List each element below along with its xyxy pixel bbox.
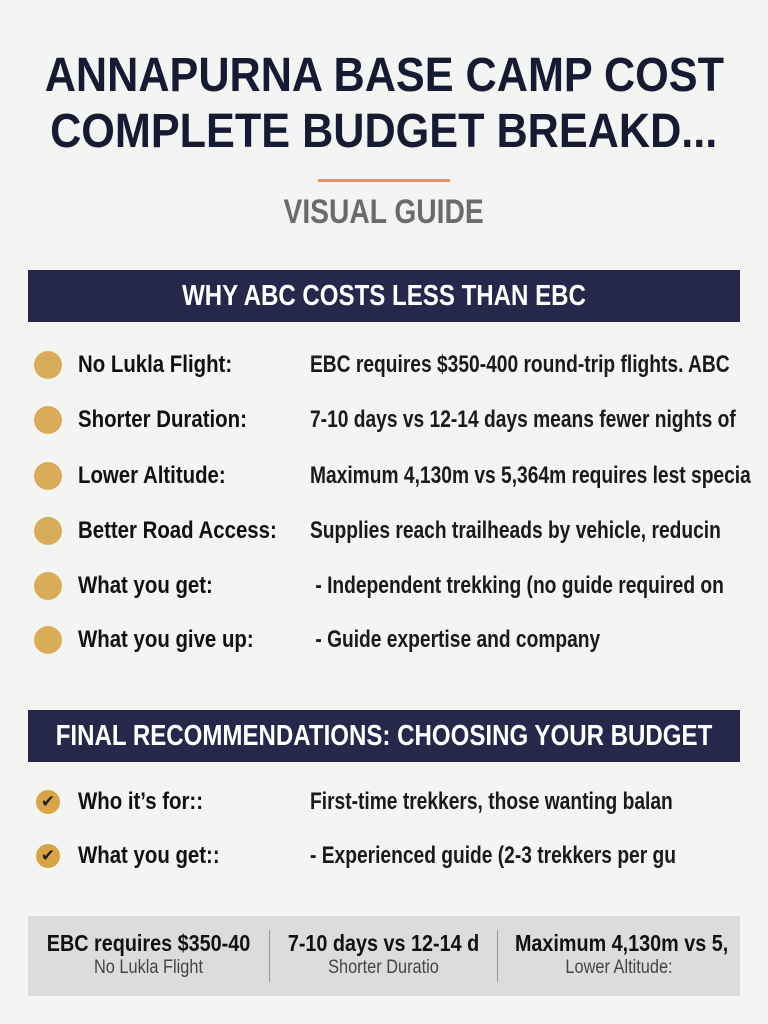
row: what you give up [34,626,600,654]
stat: duration: Shorter Duratio [328,957,439,978]
section header: final recommendations: FINAL RECOMMENDATIONS: CHOOSING YOUR BUDGET [56,720,712,752]
stat: duration [288,930,479,978]
row: shorter duration: 7-10 days vs 12-14 days means fewer nights of [310,406,736,433]
row: who it's for [36,788,673,815]
stat: flight: EBC requires $350-40 [47,930,250,956]
row: no lukla flight [34,351,730,379]
row: no lukla flight: No Lukla Flight: [78,351,232,378]
list: recommendations [36,788,676,869]
list: reasons [34,351,751,654]
divider accent [318,179,450,182]
stats strip [28,916,740,996]
row: what you get [34,572,724,600]
row: lower altitude [34,462,751,490]
stat: flight [47,930,250,978]
stat: duration: 7-10 days vs 12-14 d [288,930,479,956]
row: who it's for: ✔ [41,792,55,811]
row: what you get: - Experienced guide (2-3 trekkers per gu [310,842,676,869]
row: what you get: ✔ [41,846,55,865]
row: what you get: What you get: [78,572,213,599]
row: road access: Better Road Access: [78,517,277,544]
stat: flight: No Lukla Flight [94,957,203,978]
row: lower altitude: Lower Altitude: [78,462,226,489]
row: road access [34,517,721,545]
row: who it's for: First-time trekkers, those wanting balan [310,788,673,815]
stat: altitude [515,930,728,978]
section header: why ABC costs less: WHY ABC COSTS LESS THAN EBC [182,280,586,312]
section header: why ABC costs less [28,270,740,322]
row: who it's for: Who it’s for:: [78,788,203,815]
subtitle: VISUAL GUIDE [284,193,484,231]
row: no lukla flight: EBC requires $350-400 round-trip flights. ABC [310,351,730,378]
section header: final recommendations [28,710,740,762]
row: lower altitude: Maximum 4,130m vs 5,364m requires lest specia [310,462,751,489]
stat: altitude: Maximum 4,130m vs 5, [515,930,728,956]
row: shorter duration [34,406,736,434]
title: ANNAPURNA BASE CAMP COST [44,49,724,102]
row: road access: Supplies reach trailheads by vehicle, reducin [310,517,721,544]
row: what you get: - Independent trekking (no guide required on [315,572,724,599]
row: what you get [36,842,676,869]
row: what you give up: What you give up: [78,626,254,653]
title [44,49,724,158]
row: what you get: What you get:: [78,842,220,869]
row: shorter duration: Shorter Duration: [78,406,247,433]
stat: altitude: Lower Altitude: [565,957,673,978]
title: COMPLETE BUDGET BREAKD... [50,105,718,158]
row: what you give up: - Guide expertise and company [315,626,600,653]
